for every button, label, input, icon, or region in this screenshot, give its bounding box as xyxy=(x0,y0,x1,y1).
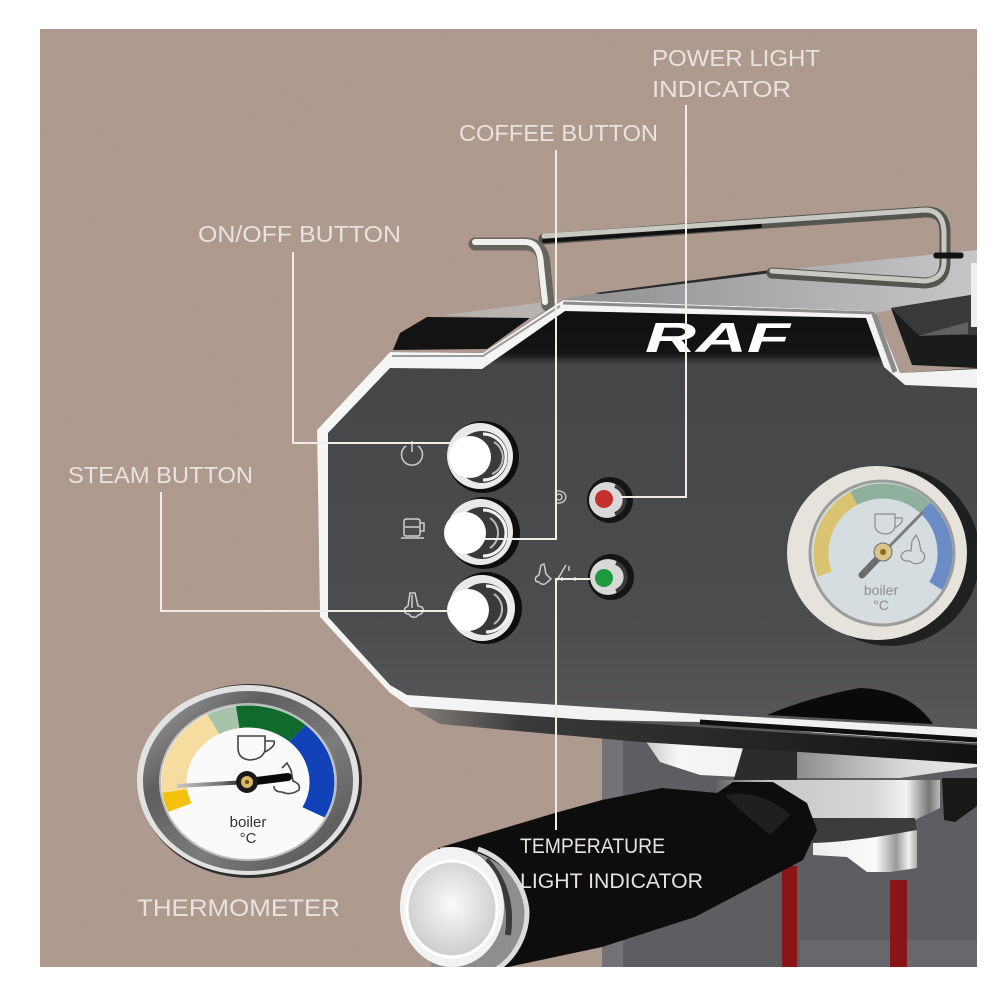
icon: cup xyxy=(401,519,424,538)
leader line: steam xyxy=(161,492,450,611)
leader line: coffee xyxy=(485,150,556,539)
gauge label: boiler xyxy=(864,582,898,598)
cup rail xyxy=(475,210,963,305)
dial icons xyxy=(238,736,299,794)
label: coffee button: COFFEE BUTTON xyxy=(459,120,658,146)
thermometer close-up: °C xyxy=(240,830,257,847)
portafilter handle xyxy=(400,782,817,975)
coffee streams xyxy=(782,866,907,967)
machine lower column xyxy=(602,735,977,967)
label: power light indicator: INDICATOR xyxy=(652,76,791,102)
group head and portafilter chrome xyxy=(645,740,977,872)
rear bar xyxy=(544,212,945,283)
panel reflection xyxy=(767,688,933,724)
chrome trim xyxy=(317,300,977,743)
icon: power xyxy=(402,441,422,465)
label: thermometer: THERMOMETER xyxy=(137,895,340,922)
leader line: on/off xyxy=(293,252,450,443)
label: temperature light indicator: LIGHT INDICATOR xyxy=(520,870,703,893)
power light red xyxy=(587,477,633,523)
brand logo: RAF xyxy=(645,314,792,361)
label: steam button: STEAM BUTTON xyxy=(68,462,253,488)
icon: steam xyxy=(404,593,423,617)
button: on/off xyxy=(447,421,519,493)
front bar xyxy=(475,244,548,305)
lower chrome ring xyxy=(717,780,940,820)
handle end cap xyxy=(400,847,528,975)
icon: light xyxy=(555,491,566,503)
button: coffee xyxy=(444,497,520,569)
label: power light indicator: POWER LIGHT xyxy=(652,45,820,71)
icon: steam and temperature xyxy=(535,564,575,584)
machine top surface xyxy=(393,250,977,368)
spout xyxy=(813,830,917,872)
label: temperature light indicator: TEMPERATURE xyxy=(520,835,665,858)
label: temperature light indicator xyxy=(520,835,703,893)
dial label: boiler xyxy=(230,814,266,831)
upper chrome ring xyxy=(645,740,977,778)
leader line: power light xyxy=(620,105,686,497)
leader line: temperature light xyxy=(556,579,590,830)
gauge on machine xyxy=(787,466,980,646)
temperature light green xyxy=(588,554,634,600)
panel underside strip xyxy=(407,705,977,764)
button: steam xyxy=(447,572,522,644)
label: power light indicator xyxy=(652,45,820,102)
label: on/off button: ON/OFF BUTTON xyxy=(198,221,401,247)
dial needle xyxy=(177,771,288,793)
machine front panel xyxy=(317,300,977,745)
thermometer close-up xyxy=(137,684,362,878)
dial scale xyxy=(174,716,322,812)
gauge needle xyxy=(862,512,923,575)
gauge icons xyxy=(875,514,925,564)
gauge on machine: °C xyxy=(873,597,889,613)
